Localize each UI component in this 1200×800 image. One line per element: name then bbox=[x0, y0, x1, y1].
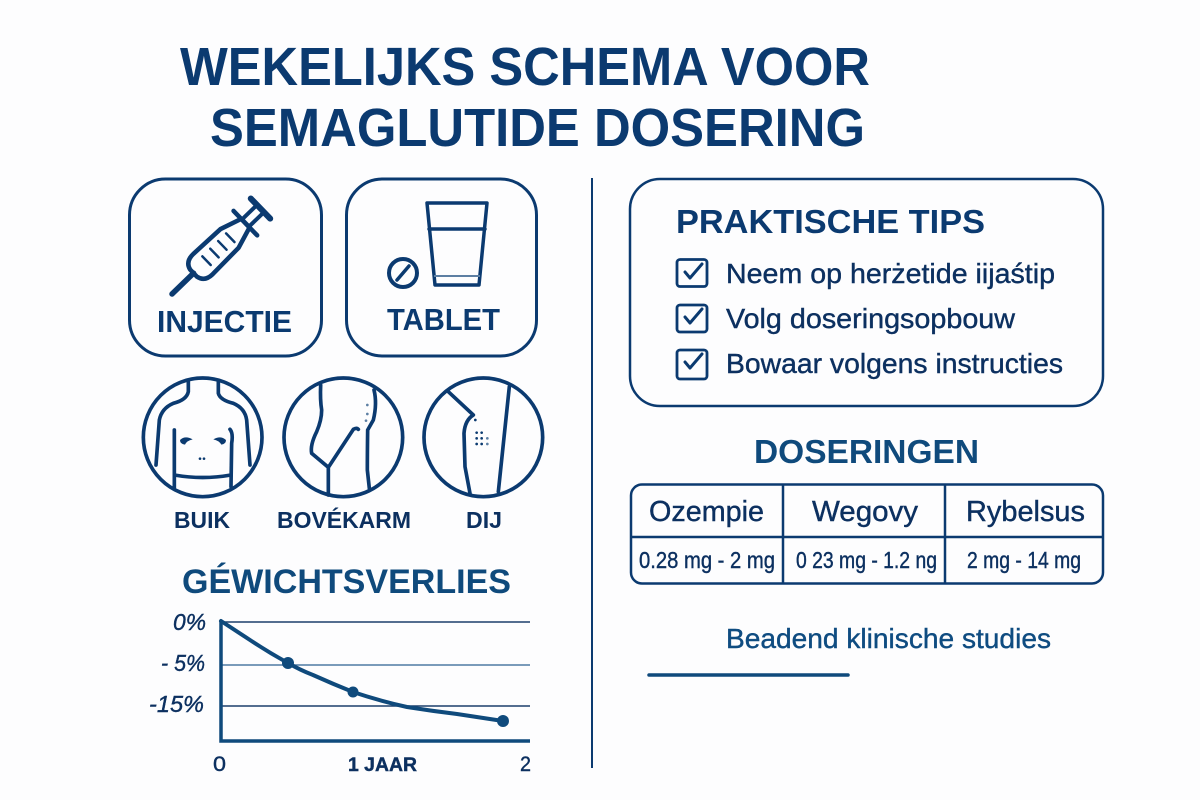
line chart: weight loss: 0% bbox=[173, 609, 206, 635]
table: doses: 0 23 mg - 1.2 ng bbox=[796, 547, 937, 573]
heading: gewichtsverlies: GÉWICHTSVERLIES bbox=[182, 563, 511, 601]
icon: abdomen bbox=[143, 378, 262, 497]
panel: tablet: TABLET bbox=[387, 302, 500, 337]
panel: praktische tips: PRAKTISCHE TIPS bbox=[676, 203, 985, 240]
title: WEKELIJKS SCHEMA VOOR bbox=[180, 37, 870, 97]
panel: injectie bbox=[130, 179, 322, 356]
icon: thigh bbox=[424, 378, 543, 497]
line chart: weight loss: 0 bbox=[213, 753, 226, 776]
line chart: weight loss: - 5% bbox=[161, 650, 205, 676]
icon: upper arm bbox=[284, 378, 403, 497]
line chart: weight loss: 1 JAAR bbox=[348, 755, 417, 776]
line chart: weight loss: -15% bbox=[149, 691, 204, 717]
icon: glass of water and pill bbox=[389, 203, 487, 287]
panel: injectie: INJECTIE bbox=[157, 304, 292, 339]
panel: injection site bovenarm bbox=[277, 378, 411, 533]
divider bbox=[591, 178, 593, 768]
panel: injection site dij: DIJ bbox=[466, 507, 502, 533]
table: doses: 2 mg - 14 mg bbox=[967, 547, 1081, 573]
icon: syringe bbox=[160, 196, 272, 306]
table: doses: Ozempie bbox=[649, 496, 764, 528]
table: doses: 0.28 mg - 2 mg bbox=[639, 547, 775, 573]
panel: injection site bovenarm: BOVÉKARM bbox=[277, 506, 411, 533]
panel: tablet bbox=[346, 179, 536, 356]
table: doses: Rybelsus bbox=[966, 496, 1085, 528]
line chart: weight loss: 2 bbox=[520, 753, 531, 776]
table: doses: Wegovy bbox=[812, 496, 919, 528]
tip 1: Neem op herżetide iijaśtip bbox=[726, 258, 1055, 289]
tip 3: Bowaar volgens instructies bbox=[726, 348, 1063, 379]
source underline bbox=[649, 673, 848, 677]
heading: doseringen: DOSERINGEN bbox=[754, 433, 979, 470]
title bbox=[180, 37, 870, 158]
title: SEMAGLUTIDE DOSERING bbox=[210, 98, 865, 158]
line chart: weight loss bbox=[149, 609, 531, 776]
tip 2: Volg doseringsopbouw bbox=[726, 303, 1016, 334]
source note: Beadend klinische studies bbox=[726, 623, 1051, 654]
panel: praktische tips bbox=[630, 179, 1103, 406]
panel: injection site buik bbox=[143, 378, 262, 533]
panel: injection site dij bbox=[424, 378, 543, 533]
panel: injection site buik: BUIK bbox=[174, 507, 230, 533]
table: doses bbox=[631, 484, 1103, 584]
